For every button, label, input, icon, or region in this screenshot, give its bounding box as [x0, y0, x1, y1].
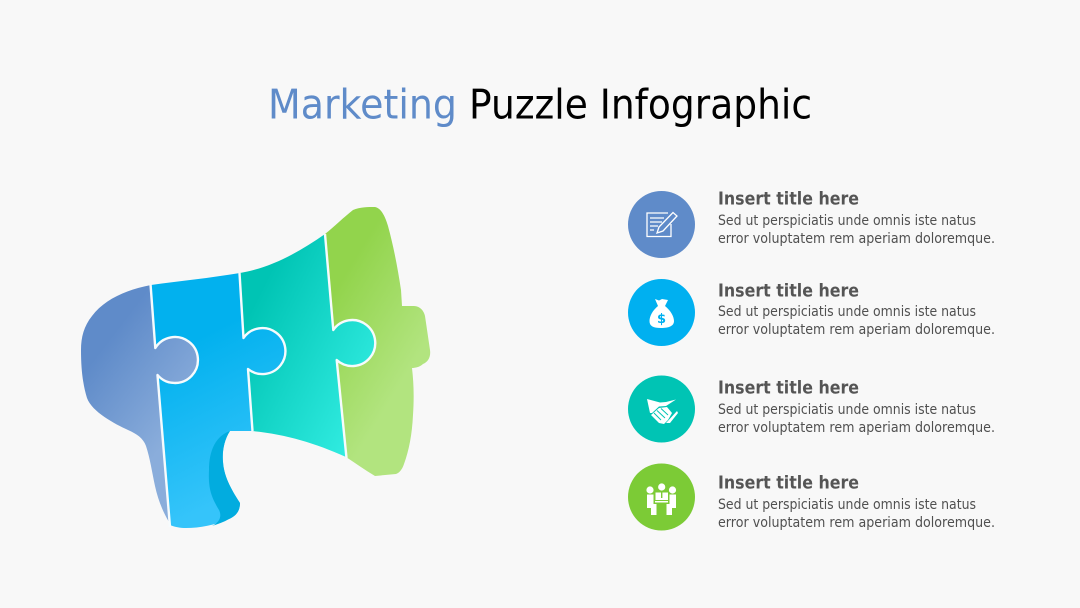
item 3 text — [718, 378, 995, 436]
item 2 text — [718, 280, 995, 338]
puzzle piece: blue section — [151, 273, 285, 528]
item 4 text: Sed ut perspiciatis unde omnis iste natus — [718, 497, 976, 513]
item 4 text: Insert title here — [718, 472, 859, 494]
item 2 text: Sed ut perspiciatis unde omnis iste natus — [718, 304, 976, 320]
puzzle piece: green megaphone bell — [325, 207, 430, 476]
item 1 text: Insert title here — [718, 188, 859, 210]
title — [268, 80, 812, 128]
item 4 text: error voluptatem rem aperiam doloremque. — [718, 515, 995, 531]
item 4 — [628, 464, 995, 531]
item 2 text: Insert title here — [718, 280, 859, 302]
icon: team meeting — [628, 464, 695, 530]
item 4 text — [718, 472, 995, 531]
puzzle piece: slate blue section — [81, 285, 198, 522]
item 1 text: error voluptatem rem aperiam doloremque. — [718, 231, 995, 247]
icon: money bag: $ — [657, 312, 666, 327]
title: Puzzle Infographic — [469, 80, 812, 128]
puzzle piece: teal section — [240, 234, 375, 457]
item 1 — [628, 188, 995, 258]
item 3 text: Sed ut perspiciatis unde omnis iste natus — [718, 402, 976, 418]
item 3 text: Insert title here — [718, 378, 859, 398]
icon: handshake — [628, 376, 695, 442]
puzzle seams — [150, 234, 375, 527]
item 3 text: error voluptatem rem aperiam doloremque. — [718, 420, 995, 436]
item 1 text — [718, 188, 995, 247]
icon: notepad and pencil — [628, 191, 695, 258]
item 1 text: Sed ut perspiciatis unde omnis iste natus — [718, 213, 976, 229]
title: Marketing — [268, 80, 457, 128]
item 3 — [628, 376, 995, 442]
handle shadow — [209, 431, 240, 526]
item 2 text: error voluptatem rem aperiam doloremque. — [718, 322, 995, 338]
megaphone puzzle illustration — [81, 207, 430, 528]
icon: money bag — [628, 279, 695, 346]
item 2 — [628, 279, 995, 346]
